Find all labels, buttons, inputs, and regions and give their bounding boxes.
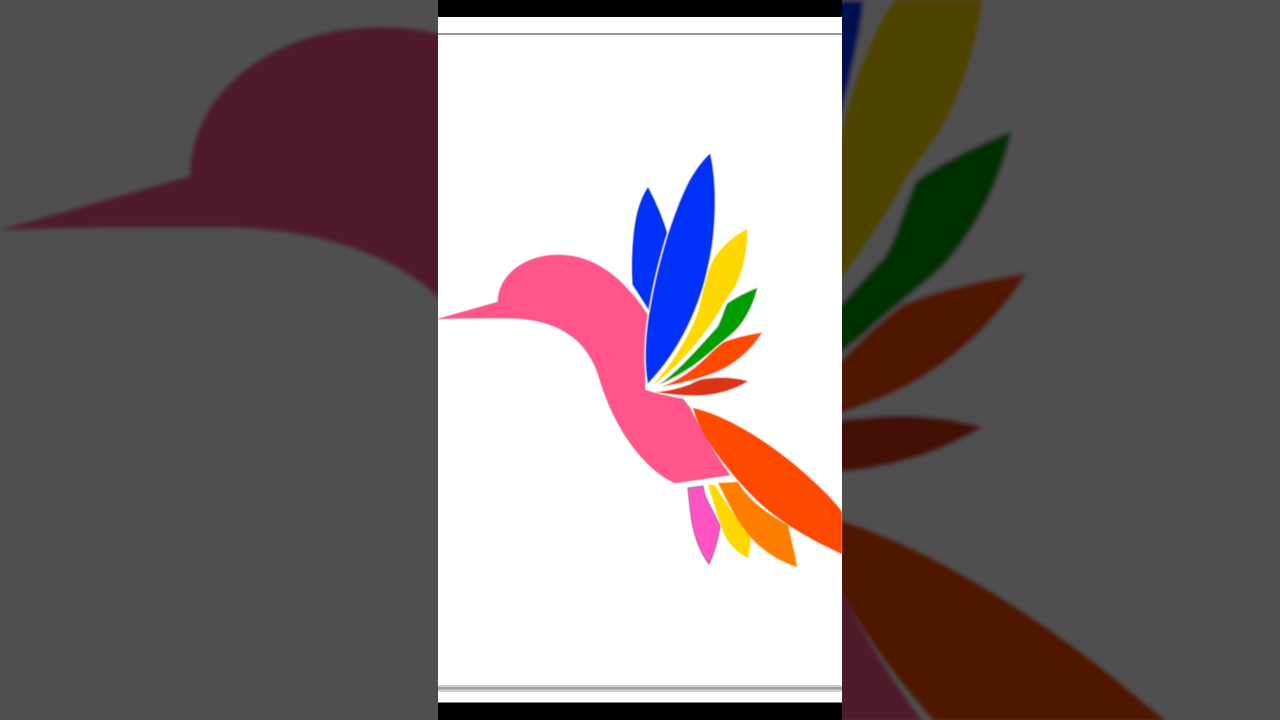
wing feather: yellow [653, 229, 747, 385]
wing feather: small blue [632, 188, 668, 310]
bird body [438, 255, 730, 483]
tail feather: orange [718, 482, 797, 567]
bottom black band [438, 702, 842, 720]
top black band [438, 0, 842, 17]
wing feathers: green, orange, red [653, 287, 763, 396]
tail feather: yellow [708, 485, 750, 558]
wing feather: large blue [646, 154, 715, 383]
hummingbird illustration [438, 154, 842, 567]
top gray rule [438, 33, 842, 35]
bottom gray rule [438, 685, 842, 692]
central video frame [438, 0, 842, 720]
tail feather: magenta [688, 486, 720, 564]
long tail feather: red-orange [693, 408, 842, 554]
